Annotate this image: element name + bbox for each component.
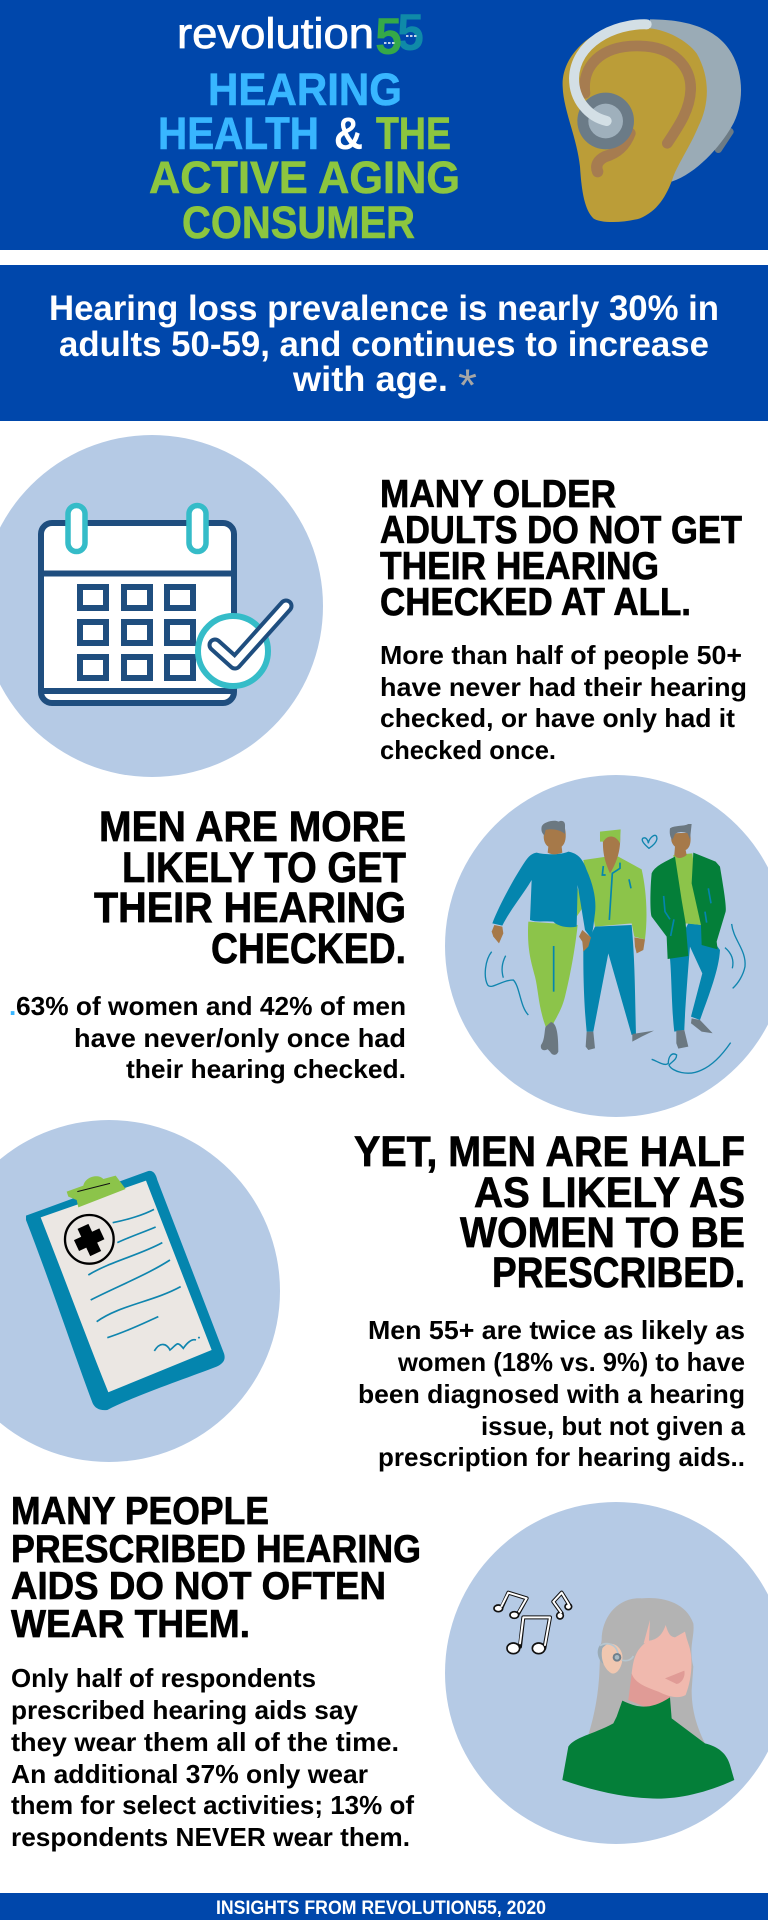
body text: more than half [380,640,747,765]
title: CONSUMER [182,197,415,248]
banner text: * [458,360,477,411]
heading: men half as likely [354,1128,745,1297]
heading: men are more likely: THEIR HEARING [94,884,406,932]
body text: men 55+: Men 55+ are twice as likely as [368,1315,745,1345]
logo: revolution55: 5 [397,4,424,62]
logo: revolution55: revolution [177,10,374,58]
panel: header [0,0,768,250]
body text: only half of respondents: Only half of respondents [11,1663,316,1693]
banner text [49,289,719,411]
footer [0,1893,768,1920]
heading: men are more likely: LIKELY TO GET [122,844,406,892]
body text: only half of respondents: respondents NEVER wear them. [11,1822,410,1852]
footer: INSIGHTS FROM REVOLUTION55, 2020 [216,1898,546,1919]
body text: more than half: have never had their hearing [380,672,747,702]
heading: men half as likely: AS LIKELY AS [474,1169,745,1217]
illustration: medical clipboard [0,1120,280,1462]
heading: many older adults: THEIR HEARING [380,545,659,588]
heading: many people prescribed: WEAR THEM. [11,1603,250,1646]
heading: many people prescribed: MANY PEOPLE [11,1490,269,1533]
icon: ear with hearing aid [563,19,741,222]
heading: men half as likely: WOMEN TO BE [460,1209,745,1257]
title: THE [376,108,451,159]
body text: men 55+: prescription for hearing aids.. [378,1442,745,1472]
body text: 63 percent of women: have never/only once had [74,1023,406,1053]
body text: only half of respondents: An additional 37% only wear [11,1759,368,1789]
body text: only half of respondents: prescribed hearing aids say [11,1695,359,1725]
title: ACTIVE AGING [149,152,460,203]
title: & [334,108,363,159]
panel: section 2 men more likely [9,775,768,1117]
heading: men are more likely [94,803,406,973]
heading: men are more likely: MEN ARE MORE [99,803,406,851]
body text: men 55+ [358,1315,746,1472]
heading: many people prescribed: PRESCRIBED HEARING [11,1528,421,1571]
heading: many older adults: CHECKED AT ALL. [380,581,691,624]
body text: more than half: More than half of people 50+ [380,640,742,670]
body text: only half of respondents: they wear them all of the time. [11,1727,399,1757]
banner text: with age. [292,360,448,399]
body text: 63 percent of women: . [9,991,16,1021]
body text: 63 percent of women: 63% of women and 42% of men [16,991,406,1021]
heading: many people prescribed [11,1490,421,1646]
heading: men half as likely: YET, MEN ARE HALF [354,1128,745,1176]
logo: revolution55 [177,4,424,66]
illustration: three men walking [445,775,768,1117]
heading: men are more likely: CHECKED. [211,925,406,973]
body text: more than half: checked once. [380,735,556,765]
body text: 63 percent of women: their hearing checked. [126,1054,406,1084]
heading: many older adults: MANY OLDER [380,473,616,516]
panel: section 1 checkups [0,435,747,777]
illustration: woman with hearing aid and music notes [445,1502,768,1844]
title: HEALTH [158,108,319,159]
panel: section 4 not wearing aids [11,1490,768,1852]
body text: 63 percent of women [9,991,406,1084]
panel: section 3 prescribed [0,1120,746,1472]
banner text: Hearing loss prevalence is nearly 30% in [49,289,719,328]
logo: revolution55: 5 [375,8,402,66]
body text: men 55+: been diagnosed with a hearing [358,1379,745,1409]
panel: prevalence banner [0,265,768,421]
body text: only half of respondents [11,1663,414,1852]
title [149,64,460,248]
heading: many people prescribed: AIDS DO NOT OFTEN [11,1565,386,1608]
body text: more than half: checked, or have only had it [380,703,735,733]
heading: many older adults [380,473,742,624]
body text: men 55+: women (18% vs. 9%) to have [397,1347,745,1377]
banner text: adults 50-59, and continues to increase [59,325,709,364]
title: HEARING [208,64,402,115]
body text: men 55+: issue, but not given a [481,1411,746,1441]
body text: only half of respondents: them for select activities; 13% of [11,1790,414,1820]
icon: calendar with check mark [0,435,323,777]
